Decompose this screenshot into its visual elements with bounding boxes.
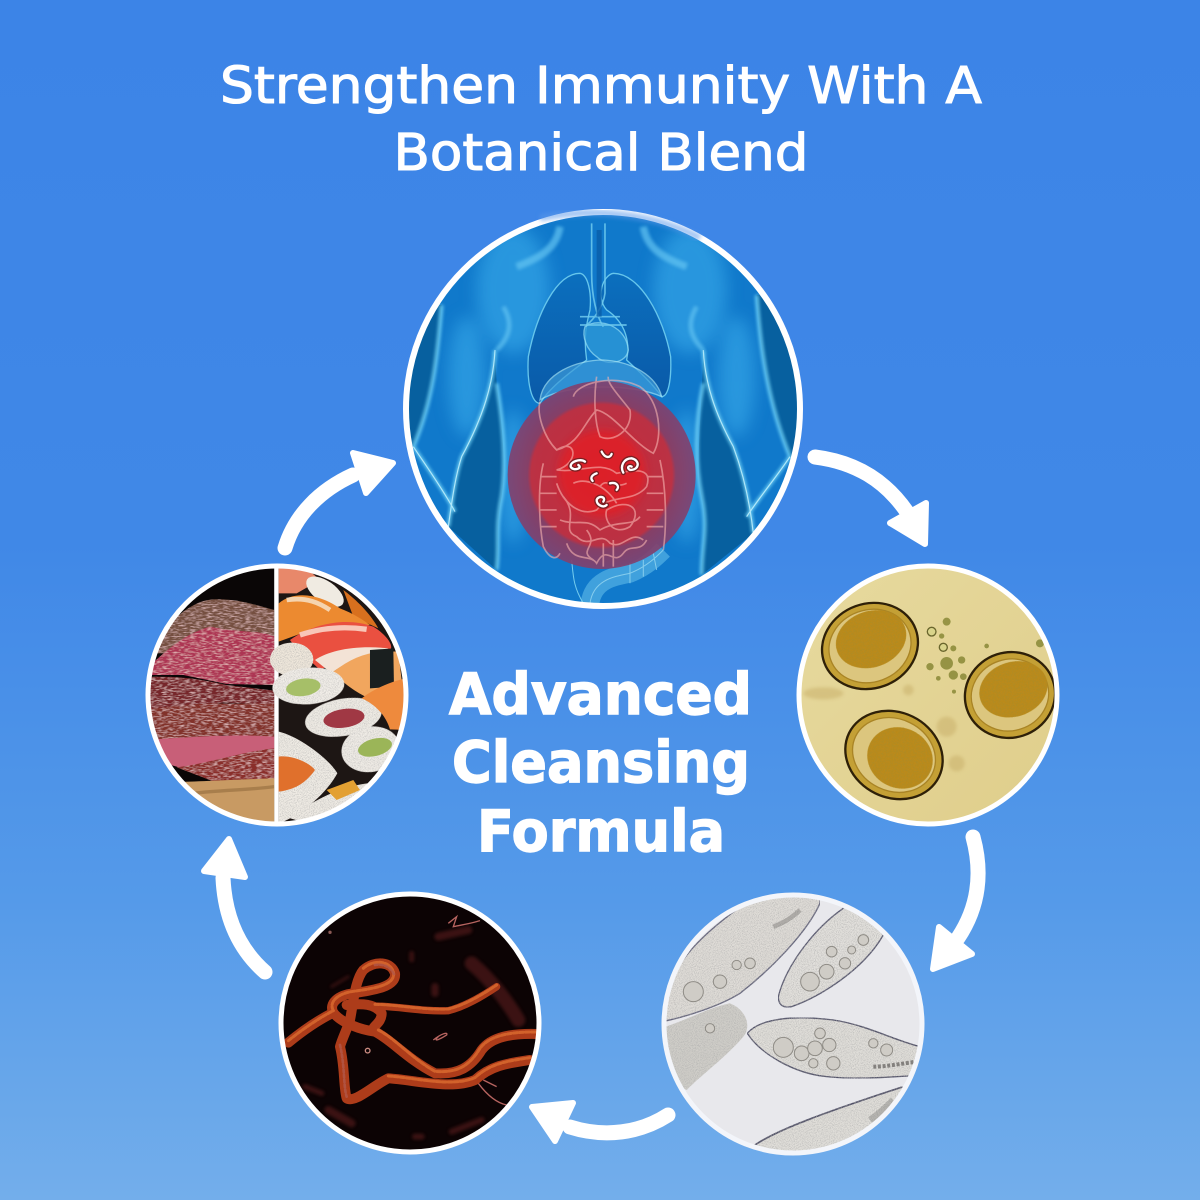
title [220, 57, 982, 183]
worms [571, 452, 638, 506]
panel: paramecium microscope view [660, 890, 930, 1160]
center heading [449, 662, 752, 865]
organelles [683, 935, 893, 1070]
egg right [964, 650, 1054, 740]
arrow: body to eggs [815, 457, 926, 544]
center heading: Advanced [449, 662, 752, 728]
lower colon [590, 550, 663, 603]
torso highlight lines [413, 295, 790, 575]
center-right cell [747, 1018, 927, 1078]
bottom cell [754, 1086, 903, 1150]
organs over the red zone [539, 377, 665, 567]
center heading: Formula [477, 799, 725, 865]
half: sushi [270, 568, 404, 822]
title: Botanical Blend [394, 124, 808, 183]
dark gaps around arms and torso [400, 290, 807, 575]
divider [274, 568, 275, 822]
red zone [508, 381, 696, 569]
panel: filovirus on dark background [275, 890, 545, 1160]
panel: raw meat and sushi [140, 560, 415, 835]
diaphragm [540, 360, 662, 400]
egg bottom [844, 710, 944, 800]
left cell [660, 1003, 747, 1090]
top-right cell [778, 908, 884, 1008]
panel: parasite eggs under microscope [795, 560, 1066, 830]
half: sliced meat [150, 568, 274, 822]
body glow [448, 227, 755, 543]
panel: human torso with infected intestine [400, 205, 810, 615]
title: Strengthen Immunity With A [220, 57, 982, 116]
arrow: food to body [285, 453, 393, 548]
debris [926, 618, 1044, 694]
main filament [288, 963, 537, 1099]
heart [584, 323, 628, 362]
blurred background strands [305, 930, 518, 1137]
top-left cell [660, 890, 820, 1022]
faint blotches [803, 685, 965, 771]
trachea and esophagus [580, 223, 627, 327]
center heading: Cleansing [452, 730, 750, 796]
arrow: eggs to paramecium [933, 837, 978, 969]
egg top left [820, 602, 920, 690]
small pale strands [433, 917, 507, 1105]
shoulders and neck [497, 227, 703, 350]
arrow: virus to food [204, 839, 265, 972]
arrow: paramecium to virus [532, 1103, 668, 1141]
lungs [528, 273, 671, 403]
